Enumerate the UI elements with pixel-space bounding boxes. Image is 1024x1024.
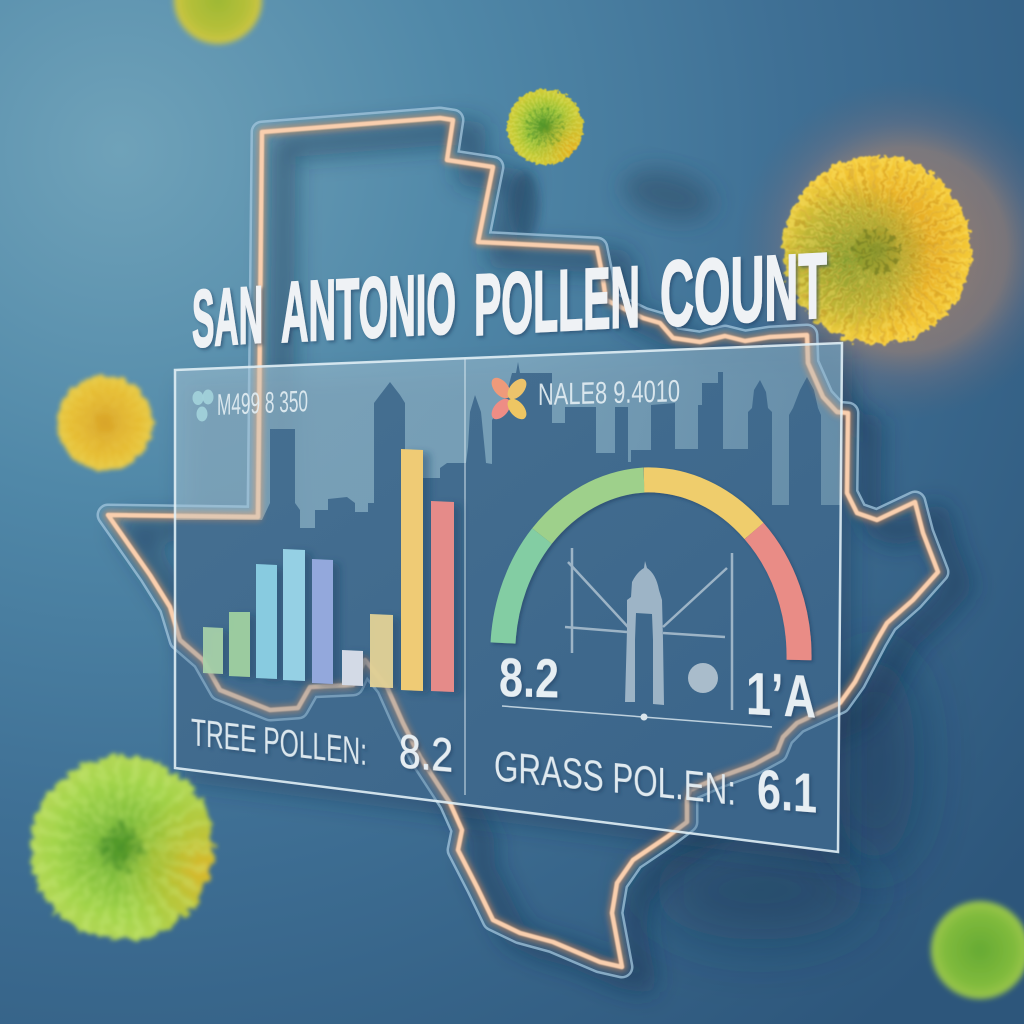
pollen: large yellow glow	[735, 80, 1024, 420]
title: ANTONIO	[281, 256, 456, 361]
pollen: large green bottom left	[30, 756, 214, 940]
pollen: small green near top	[507, 89, 583, 165]
small label left: M499 8 350	[217, 385, 308, 422]
city skyline	[175, 362, 842, 860]
pollen: top blurred	[174, 0, 262, 44]
title: SAN	[192, 270, 263, 365]
icon: clover	[192, 390, 214, 422]
Texas outline seen through the glass	[175, 344, 841, 832]
gauge value low: 8.2	[499, 646, 559, 710]
bar chart: tree pollen	[203, 449, 454, 692]
gauge chart	[503, 480, 799, 660]
map of Texas outline	[96, 106, 950, 978]
panel body	[175, 343, 842, 852]
gauge value high: 1’A	[746, 660, 816, 731]
icon: flower	[488, 374, 530, 423]
small label right: NALE8 9.4010	[538, 373, 680, 412]
panel edge	[175, 343, 842, 852]
title: POLLEN	[474, 248, 640, 354]
pollen: blurred green bottom right	[931, 901, 1024, 999]
glass panel	[174, 342, 844, 854]
panel divider	[464, 358, 466, 795]
pollen: blurred yellow left	[57, 375, 153, 471]
grass pollen label: GRASS POL.EN:	[494, 742, 736, 815]
grass pollen value: 6.1	[757, 757, 817, 825]
pollen: large yellow	[783, 156, 971, 344]
title	[192, 233, 827, 365]
shadows cast on the wall	[130, 132, 960, 981]
title: COUNT	[660, 233, 827, 346]
gauge baseline	[502, 706, 772, 727]
icon: capitol landmark with gauge needles	[565, 548, 732, 710]
tree pollen label: TREE POLLEN:	[191, 711, 367, 774]
tree pollen value: 8.2	[399, 724, 453, 782]
